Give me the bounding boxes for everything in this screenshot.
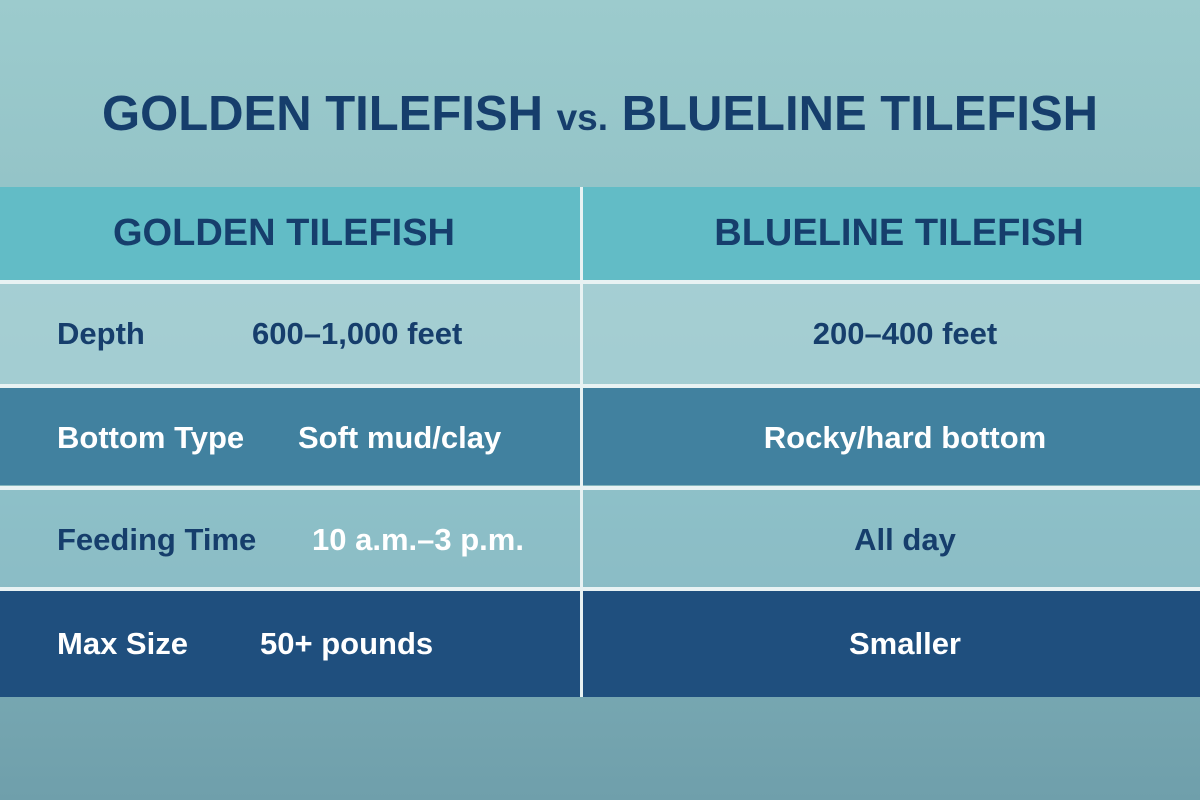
row: bottom type — [0, 388, 1200, 485]
header row — [0, 187, 1200, 280]
row: bottom type: Rocky/hard bottom — [764, 420, 1046, 455]
row: depth: Depth — [57, 316, 145, 351]
row: max size: Smaller — [849, 626, 961, 661]
row: bottom type: Soft mud/clay — [298, 420, 501, 455]
header: golden: GOLDEN TILEFISH — [113, 212, 455, 254]
table — [0, 187, 1200, 697]
row: max size — [0, 590, 1200, 697]
row: max size: 50+ pounds — [260, 626, 433, 661]
row: depth — [0, 284, 1200, 384]
row: max size: Max Size — [57, 626, 188, 661]
row: feeding time: Feeding Time — [57, 522, 256, 557]
row: depth: 200–400 feet — [813, 316, 997, 351]
row: feeding time: 10 a.m.–3 p.m. — [312, 522, 524, 557]
row: bottom type: Bottom Type — [57, 420, 244, 455]
row: feeding time — [0, 490, 1200, 587]
row: feeding time: All day — [854, 522, 956, 557]
header: blueline: BLUELINE TILEFISH — [714, 212, 1084, 254]
title: GOLDEN TILEFISH vs. BLUELINE TILEFISH — [102, 87, 1098, 141]
row: depth: 600–1,000 feet — [252, 316, 462, 351]
